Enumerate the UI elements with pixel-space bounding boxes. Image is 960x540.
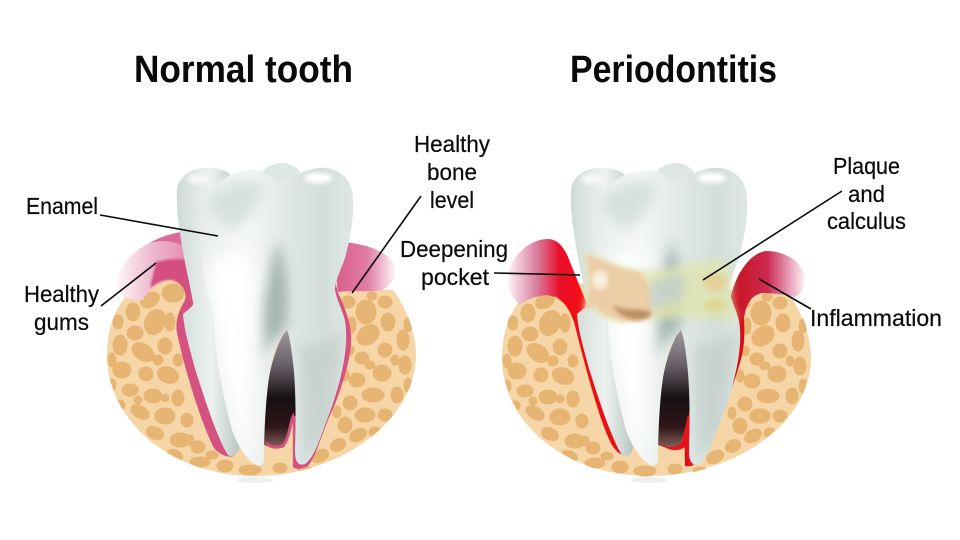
bone spots bbox=[504, 286, 806, 475]
label: Plaque and calculus bbox=[703, 153, 906, 280]
inflamed strip left bbox=[547, 295, 635, 455]
root membrane left bbox=[173, 280, 240, 457]
label: Deepening pocket bbox=[400, 236, 580, 290]
inflamed gum left bbox=[508, 239, 586, 322]
healthy gum right bbox=[335, 242, 395, 292]
inflamed gum right bbox=[730, 251, 805, 320]
tooth bbox=[571, 163, 747, 466]
label: Healthy bone level: Healthy bbox=[414, 131, 490, 157]
title: Periodontitis: Periodontitis bbox=[570, 49, 777, 91]
label: Plaque and calculus: and bbox=[848, 181, 885, 207]
label: Healthy bone level: bone bbox=[427, 159, 477, 185]
tooth bbox=[177, 163, 353, 466]
label: Healthy gums: Healthy bbox=[24, 281, 99, 307]
label: Healthy bone level bbox=[352, 131, 490, 293]
leader line: Inflammation bbox=[759, 279, 811, 309]
root gap bbox=[658, 328, 691, 448]
panel: normal tooth illustration bbox=[107, 163, 416, 483]
root membrane right bbox=[292, 280, 351, 469]
plaque and calculus bbox=[581, 252, 738, 322]
gum left rim bbox=[150, 232, 187, 248]
leader line: Deepening pocket bbox=[494, 273, 580, 275]
panel: periodontitis illustration bbox=[502, 163, 811, 483]
leader line: Healthy gums bbox=[101, 263, 156, 306]
title: Normal tooth: Normal tooth bbox=[134, 49, 353, 91]
label: Enamel bbox=[26, 193, 218, 236]
label: Deepening pocket: pocket bbox=[421, 264, 490, 290]
label: Inflammation bbox=[759, 279, 942, 331]
bone spots bbox=[109, 285, 411, 474]
label: Plaque and calculus: calculus bbox=[827, 208, 906, 234]
bone bbox=[107, 280, 416, 476]
gum between roots bbox=[266, 417, 296, 467]
gum left dark band bbox=[150, 259, 200, 305]
label: Healthy bone level: level bbox=[430, 187, 474, 213]
label: Inflammation: Inflammation bbox=[810, 305, 942, 331]
healthy gum left bbox=[117, 232, 200, 303]
leader line: Plaque and calculus bbox=[703, 191, 842, 280]
leader line: Enamel bbox=[100, 215, 218, 236]
gum between roots bbox=[660, 393, 693, 466]
label: Healthy gums: gums bbox=[34, 309, 89, 335]
root gap bbox=[264, 328, 297, 448]
leader line: Healthy bone level bbox=[352, 196, 421, 293]
label: Deepening pocket: Deepening bbox=[400, 236, 508, 262]
inflamed strip right bbox=[682, 300, 744, 466]
label: Plaque and calculus: Plaque bbox=[833, 153, 900, 179]
label: Healthy gums bbox=[24, 263, 156, 335]
label: Enamel: Enamel bbox=[26, 193, 98, 219]
bone bbox=[502, 283, 811, 476]
